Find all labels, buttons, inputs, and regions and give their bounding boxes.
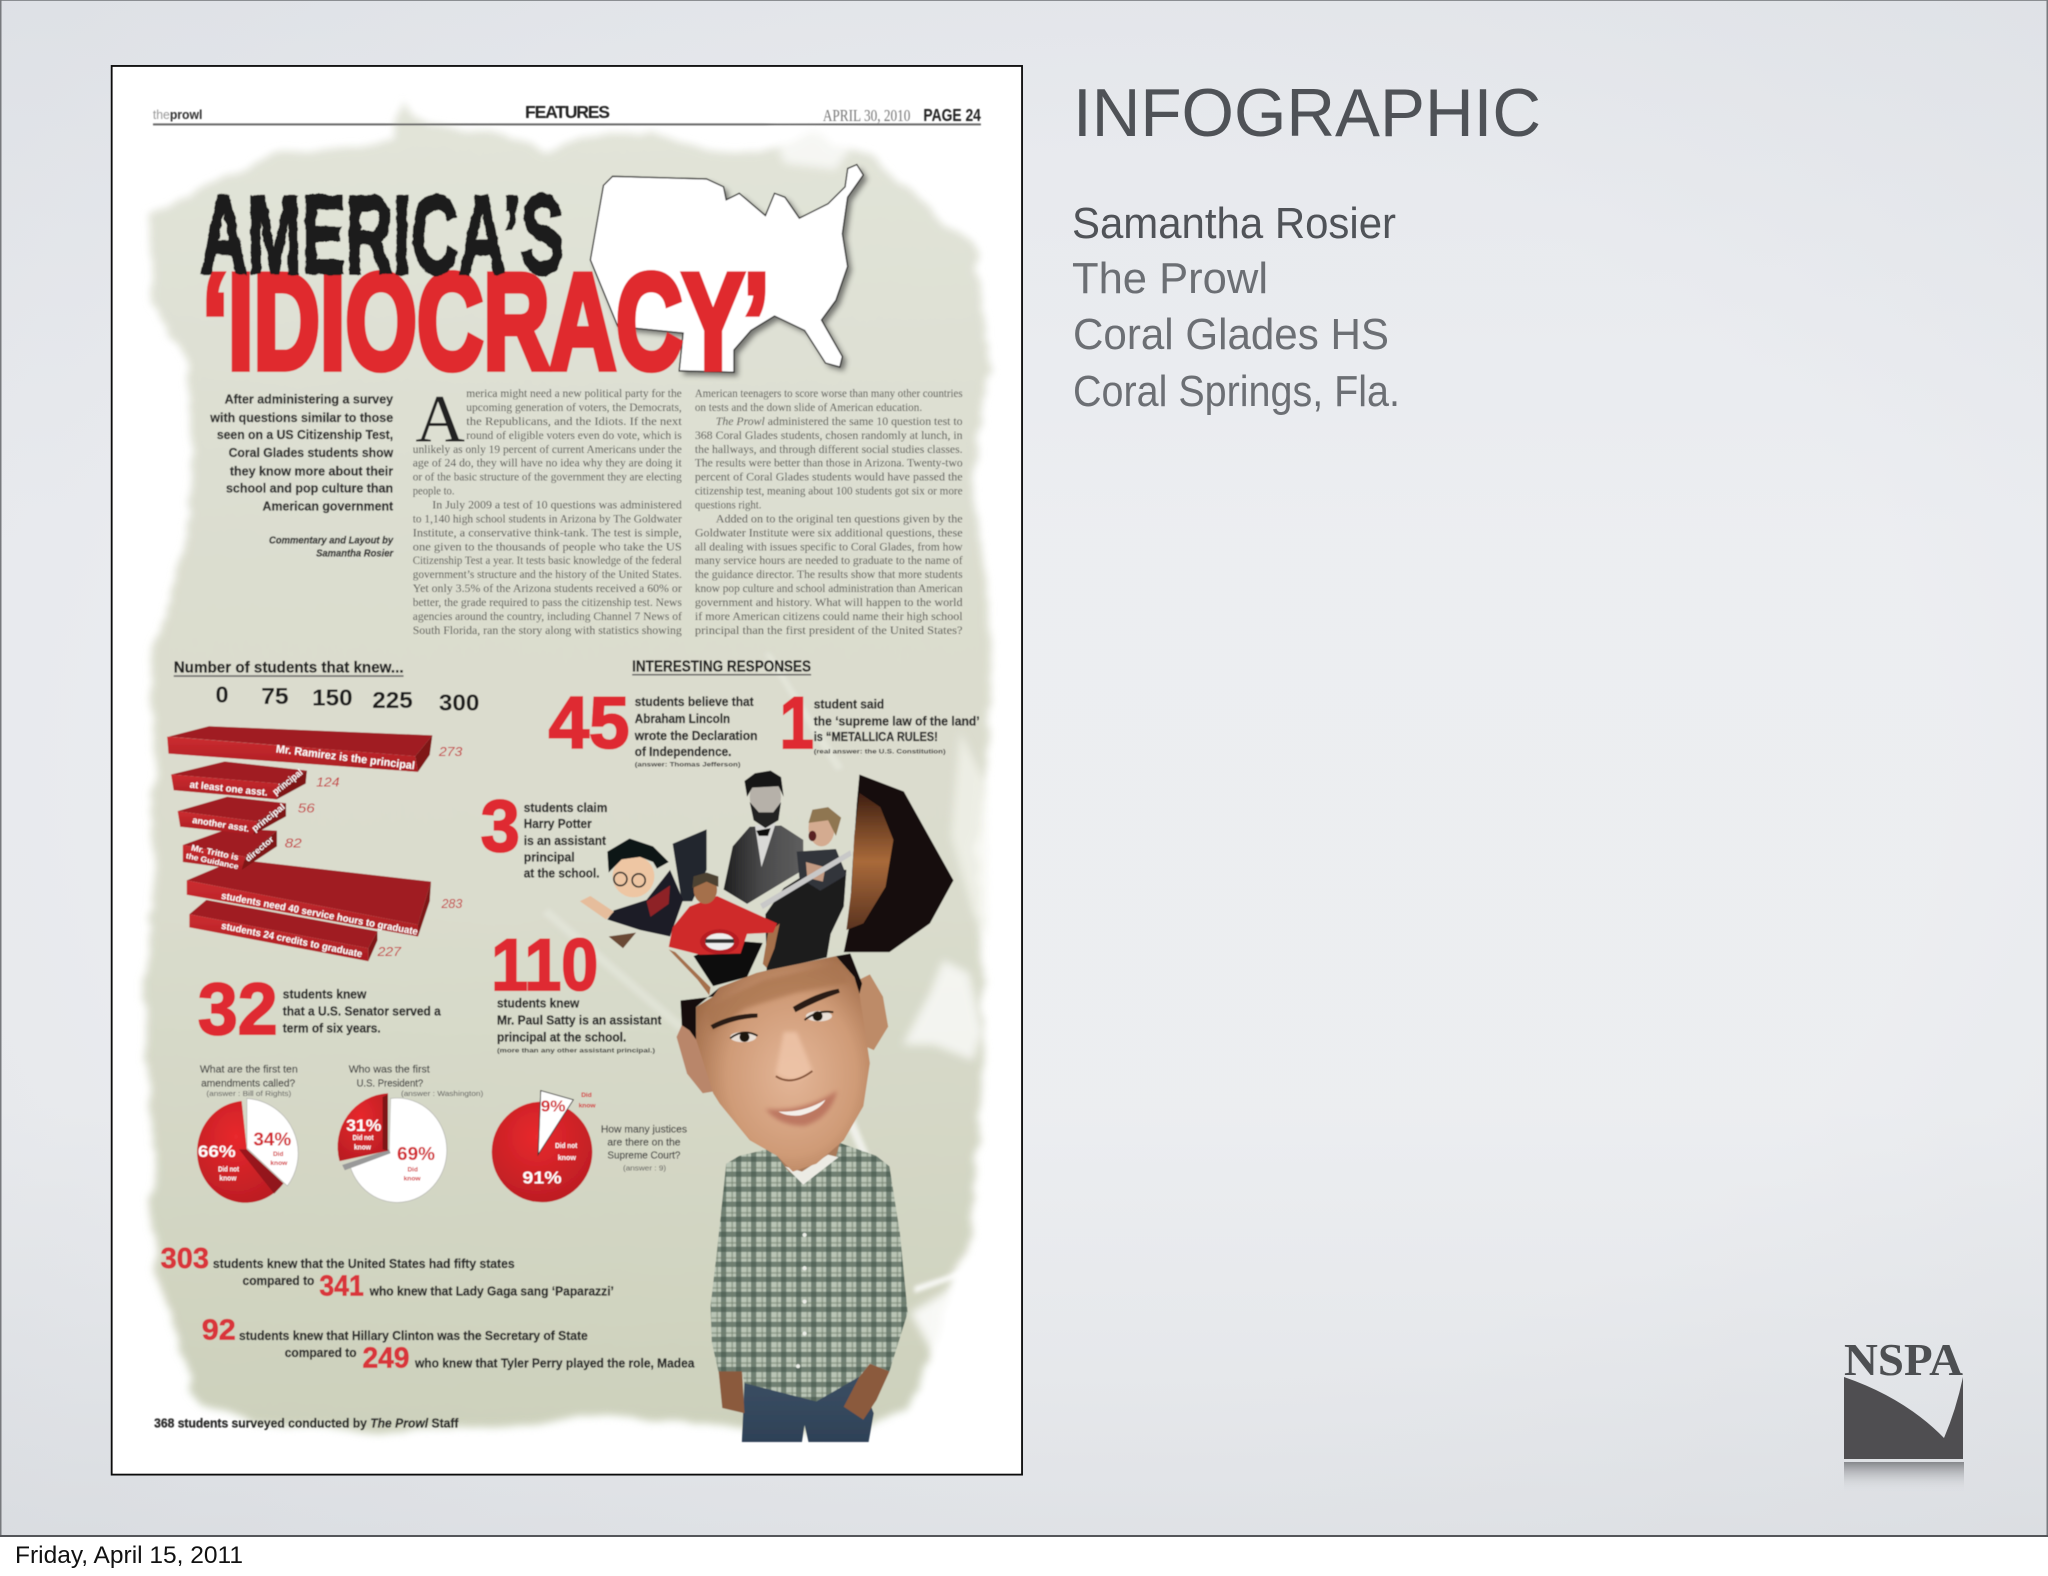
hair	[680, 953, 862, 1040]
icon: white US map	[590, 165, 867, 376]
bar: Mr. Ramirez is the principal: Mr. Ramirez is the principal	[275, 743, 415, 772]
comparison stat: 92 versus 249: students knew that Hillary Clinton was the Secretary of State	[239, 1328, 588, 1343]
supreme court question: (answer : 9)	[623, 1164, 666, 1172]
comparison stat: 303 versus 341: students knew that the United States had fifty states	[213, 1256, 515, 1271]
hands	[718, 1369, 744, 1413]
article column 1: one given to the thousands of people who take the US	[413, 541, 682, 553]
pie chart: first ten amendments: 66%	[198, 1142, 236, 1161]
bar: Mr. Tritto is the Guidance director: 82	[285, 836, 303, 851]
stat: 110 students: 110	[491, 925, 598, 1006]
article column 1: South Florida, ran the story along with statistics showing	[413, 625, 682, 637]
standfirst text: school and pop culture than	[226, 481, 393, 495]
date caption: Friday, April 15, 2011	[15, 1542, 243, 1569]
shirt buttons	[796, 1233, 807, 1368]
supreme court question: are there on the	[607, 1137, 681, 1148]
standfirst text: After administering a survey	[225, 393, 393, 407]
standfirst text: Commentary and Layout by	[269, 535, 394, 546]
comparison stat: 92 versus 249: 92	[202, 1314, 236, 1346]
bar: Mr. Ramirez is the principal	[167, 726, 463, 772]
stat: 32 students: that a U.S. Senator served a	[283, 1004, 441, 1019]
pie chart: first president: know	[354, 1143, 371, 1151]
article column 2: The results were better than those in Arizona. Twenty-two	[695, 458, 963, 470]
pie chart: supreme court justices: know	[558, 1154, 576, 1162]
stat: 110 students: Mr. Paul Satty is an assistant	[497, 1013, 662, 1028]
stat: 32 students: 32	[198, 969, 278, 1050]
bar: students need 40 service hours to graduate	[187, 859, 463, 938]
heading: INFOGRAPHIC: INFOGRAPHIC	[1073, 75, 1541, 151]
pie chart: supreme court justices: know	[579, 1103, 597, 1110]
stat: 3 students: is an assistant	[524, 833, 607, 848]
article column 2	[695, 388, 964, 637]
plaid shirt	[711, 1143, 908, 1401]
stat: 3 students	[481, 786, 607, 881]
bar: Mr. Ramirez is the principal: 273	[438, 744, 463, 759]
bar: at least one asst. principal: 124	[316, 774, 340, 789]
article column 1: merica might need a new political party for the	[466, 388, 682, 400]
stat: 45 students: (answer: Thomas Jefferson)	[635, 762, 741, 769]
nose	[776, 1032, 812, 1080]
page header: APRIL 30, 2010	[823, 106, 910, 125]
supreme court question	[601, 1124, 687, 1172]
illustration: Harry Potter	[580, 829, 707, 948]
bar: Mr. Tritto is the Guidance director	[183, 828, 303, 871]
chart axis labels	[216, 682, 479, 716]
chart axis labels: 75	[261, 683, 289, 709]
pie chart: first ten amendments: What are the first ten	[200, 1064, 298, 1075]
illustration: student with open head	[677, 953, 908, 1442]
article column 1: government’s structure and the history of the United States.	[413, 569, 682, 581]
stat: 3 students: principal	[524, 849, 575, 864]
article column 1	[413, 380, 683, 637]
comparison stat: 303 versus 341: 303	[161, 1243, 209, 1275]
stat: 45 students	[549, 683, 758, 769]
supreme court question: Supreme Court?	[607, 1151, 681, 1162]
pie chart: first president: know	[404, 1176, 422, 1183]
standfirst text: they know more about their	[230, 464, 393, 478]
stat: 1 student: is “METALLICA RULES!	[814, 729, 938, 744]
pie chart: first president: 31%	[346, 1116, 381, 1135]
article column 1: better, the grade required to pass the citizenship test. News	[413, 597, 682, 609]
bar: Mr. Tritto is the Guidance director: director	[243, 834, 276, 864]
bar chart: number of students that knew	[167, 660, 479, 961]
smile	[765, 1091, 837, 1126]
pie chart: first ten amendments: Did	[273, 1151, 283, 1158]
article column 1: Yet only 3.5% of the Arizona students received a 60% or	[413, 583, 682, 595]
stat: 45 students: of Independence.	[635, 744, 731, 759]
stat: 110 students	[491, 925, 662, 1055]
article column 1: round of eligible voters even do vote, which is	[466, 430, 682, 442]
page header: PAGE 24	[923, 105, 981, 125]
page header: FEATURES	[525, 102, 610, 122]
pie chart: first ten amendments: (answer : Bill of Rights)	[206, 1090, 291, 1098]
stat: 1 student: the ‘supreme law of the land’	[814, 714, 980, 729]
pie chart: first ten amendments: amendments called?	[201, 1079, 295, 1090]
forehead shading	[705, 964, 849, 1032]
stat: 32 students: students knew	[283, 987, 367, 1002]
stat: 45 students: Abraham Lincoln	[635, 711, 730, 726]
survey footnote: 368 students surveyed conducted by The Prowl Staff	[154, 1416, 459, 1431]
pie chart: first president: 69%	[397, 1143, 435, 1164]
chart heading: Number of students that knew...	[174, 660, 404, 677]
pie chart: first president: Did	[408, 1167, 418, 1174]
title	[200, 172, 769, 397]
article column 1: or of the basic structure of the government they are electing	[413, 472, 682, 484]
comparison stat: 303 versus 341: 341	[319, 1271, 364, 1303]
pie chart: supreme court justices	[492, 1091, 687, 1202]
author credit block: The Prowl	[1072, 254, 1268, 303]
heading: interesting responses: INTERESTING RESPONSES	[632, 658, 811, 675]
standfirst text: American government	[263, 500, 394, 514]
pie chart: first ten amendments: Did not	[218, 1166, 240, 1174]
article column 1: the Republicans, and the Idiots. If the next	[466, 416, 683, 428]
article column 2: on tests and the down slide of American education.	[695, 402, 922, 414]
title: AMERICA’S	[200, 172, 564, 297]
article column 1: Institute, a conservative think-tank. The test is simple,	[413, 527, 682, 539]
author credit block: Coral Springs, Fla.	[1073, 367, 1400, 416]
pie chart: first ten amendments: 34%	[253, 1128, 291, 1149]
comparison stat: 92 versus 249: who knew that Tyler Perry played the role, Madea	[414, 1356, 695, 1371]
article column 2: know pop culture and school administration than American	[695, 583, 963, 595]
article column 2: if more American citizens could name their high school	[695, 611, 963, 623]
stat: 110 students: (more than any other assistant principal.)	[497, 1048, 655, 1055]
pie chart: supreme court justices: 91%	[522, 1167, 562, 1187]
stat: 3 students: Harry Potter	[524, 816, 592, 831]
bar: another asst. principal: 56	[298, 800, 316, 815]
paint background texture	[145, 102, 993, 1432]
chart axis labels: 300	[439, 690, 479, 716]
NSPA logo: NSPA	[1844, 1334, 1963, 1385]
pie chart: first president: Did not	[353, 1134, 374, 1142]
article column 1: Citizenship Test a year. It tests basic knowledge of the federal	[413, 555, 682, 567]
page header	[153, 102, 981, 125]
pie chart: supreme court justices: 9%	[541, 1099, 566, 1116]
stat: 3 students: 3	[481, 786, 520, 867]
page header: theprowl	[153, 107, 202, 122]
stat: 110 students: principal at the school.	[497, 1030, 626, 1045]
article column 1: upcoming generation of voters, the Democrats,	[466, 402, 682, 414]
supreme court question: How many justices	[601, 1124, 687, 1135]
article column 1: agencies around the country, including Channel 7 News of	[413, 611, 682, 623]
article column 2: questions right.	[695, 499, 762, 511]
pie chart: supreme court justices: Did	[581, 1092, 592, 1099]
pie chart: first president: Who was the first	[349, 1064, 430, 1075]
NSPA logo	[1844, 1334, 1964, 1492]
title: ‘IDIOCRACY’	[202, 245, 769, 397]
bar: another asst. principal: another asst.	[192, 815, 250, 834]
eyebrows	[711, 1014, 758, 1029]
bar: students 24 credits to graduate	[189, 900, 402, 961]
eyes	[730, 1032, 756, 1042]
bar: another asst. principal: principal	[250, 802, 287, 834]
stat: 1 student: 1	[780, 683, 814, 764]
face	[696, 956, 870, 1172]
neck and undershirt	[771, 1134, 842, 1182]
standfirst text	[209, 393, 394, 559]
standfirst text: seen on a US Citizenship Test,	[217, 428, 393, 442]
article column 1: A	[415, 380, 465, 456]
stat: 3 students: at the school.	[524, 866, 600, 881]
article column 2: principal than the first president of the United States?	[695, 625, 963, 637]
comparison stat: 92 versus 249	[202, 1314, 695, 1375]
article column 1: people to.	[413, 485, 455, 497]
article column 2: Goldwater Institute were six additional questions, these	[695, 527, 963, 539]
bar: students need 40 service hours to graduate: 283	[441, 896, 463, 911]
bar: another asst. principal	[178, 797, 316, 835]
pie chart: first ten amendments: know	[219, 1175, 237, 1183]
comparison stat: 303 versus 341	[161, 1243, 614, 1303]
article column 2: citizenship test, meaning about 100 students got six or more	[695, 485, 963, 497]
stat: 1 student: student said	[814, 697, 884, 712]
article column 1: age of 24 do, they will have no idea why they are doing it	[413, 458, 683, 470]
stat: 45 students: students believe that	[635, 694, 754, 709]
article column 2: 368 Coral Glades students, chosen randomly at lunch, in	[695, 430, 963, 442]
stat: 1 student: (real answer: the U.S. Constitution)	[814, 749, 946, 756]
comparison stat: 303 versus 341: who knew that Lady Gaga sang ‘Paparazzi’	[369, 1284, 614, 1299]
bar: Mr. Tritto is the Guidance director: the Guidance	[185, 851, 240, 871]
standfirst text: Samantha Rosier	[316, 548, 394, 559]
illustration: flipped top of head	[844, 775, 953, 952]
article column 1: unlikely as only 19 percent of current Americans under the	[413, 444, 682, 456]
stat: 45 students: wrote the Declaration	[634, 728, 758, 743]
bar: students need 40 service hours to graduate: students need 40 service hours to graduate	[220, 891, 419, 938]
article column 2: Added on to the original ten questions given by the	[716, 513, 963, 525]
comparison stat: 92 versus 249: compared to	[285, 1345, 357, 1360]
ears	[854, 974, 888, 1050]
standfirst text: Coral Glades students show	[229, 446, 393, 460]
pie chart: first president: (answer : Washington)	[401, 1090, 483, 1098]
article column 1: to 1,140 high school students in Arizona by The Goldwater	[413, 513, 682, 525]
article column 2: the guidance director. The results show that more students	[695, 569, 963, 581]
magazine page panel	[112, 66, 1022, 1475]
article column 2: the hallways, and through different social studies classes.	[695, 444, 963, 456]
pie chart: first president	[338, 1064, 483, 1202]
pie chart: first ten amendments	[197, 1064, 298, 1203]
bar: students 24 credits to graduate: 227	[376, 944, 402, 959]
pie chart: first president: U.S. President?	[357, 1079, 423, 1090]
article column 2: many service hours are needed to graduate to the name of	[695, 555, 963, 567]
pie chart: supreme court justices: Did not	[555, 1142, 578, 1150]
comparison stat: 303 versus 341: compared to	[243, 1273, 314, 1288]
bar: at least one asst. principal: at least one asst.	[189, 780, 268, 799]
bar: Mr. Tritto is the Guidance director: Mr. Tritto is	[190, 842, 240, 862]
stat: 110 students: students knew	[497, 996, 580, 1011]
stat: 32 students: term of six years.	[283, 1020, 381, 1035]
author credit block: Coral Glades HS	[1073, 310, 1389, 359]
article column 1: In July 2009 a test of 10 questions was administered	[432, 499, 682, 511]
stat: 45 students: 45	[549, 683, 630, 764]
illustration: student in red shirt	[669, 872, 780, 995]
chart axis labels: 0	[216, 682, 229, 708]
bar: at least one asst. principal	[171, 761, 340, 799]
author credit block	[1072, 199, 1400, 416]
article column 2: government and history. What will happen to the world	[695, 597, 963, 609]
bar: students 24 credits to graduate: students 24 credits to graduate	[220, 921, 364, 960]
illustration: Lincoln	[724, 771, 803, 904]
article column 2: The Prowl administered the same 10 question test to	[716, 416, 963, 428]
stat: 32 students	[198, 969, 441, 1050]
jeans	[742, 1377, 874, 1442]
stat: 3 students: students claim	[524, 800, 607, 815]
article column 2: all dealing with issues specific to Coral Glades, from how	[695, 541, 964, 553]
chart axis labels: 150	[312, 684, 353, 710]
pie chart: first ten amendments: know	[270, 1160, 288, 1167]
article column 2: American teenagers to score worse than many other countries	[695, 388, 963, 400]
standfirst text: with questions similar to those	[209, 411, 393, 425]
article column 2: percent of Coral Glades students would have passed the	[695, 472, 963, 484]
illustration: guitarist	[760, 807, 852, 970]
chart axis labels: 225	[372, 687, 413, 713]
author credit block: Samantha Rosier	[1072, 199, 1396, 248]
bar: at least one asst. principal: principal	[271, 767, 305, 798]
stat: 1 student	[780, 683, 980, 764]
comparison stat: 92 versus 249: 249	[362, 1343, 409, 1375]
